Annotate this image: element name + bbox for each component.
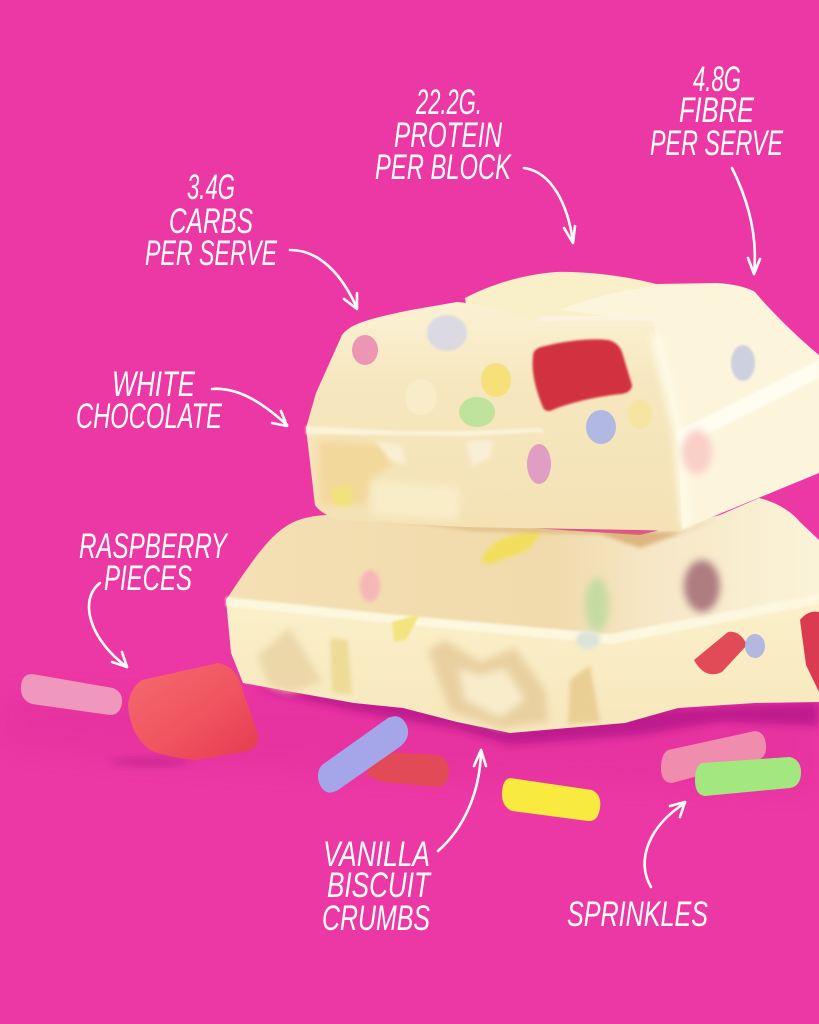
green sprinkle [695,757,801,796]
label: vanilla biscuit crumbs: CRUMBS [322,899,430,938]
arrow: vanilla [438,750,486,851]
arrow: protein [524,168,575,243]
label: protein: PROTEIN [394,116,502,155]
label: carbs [145,168,277,273]
arrow: carbs [290,250,357,309]
crumb texture [428,640,548,728]
label: white chocolate [76,365,222,436]
label: protein [375,83,512,187]
lower chocolate block [226,498,819,733]
label: carbs: CARBS [169,202,253,241]
yellow sprinkle [502,778,600,821]
lower block ledge highlight [226,594,819,644]
purple sprinkle [318,716,408,793]
arrow: sprinkles [645,802,685,887]
upper block front face [306,302,682,531]
label: sprinkles: SPRINKLES [567,895,708,934]
red sprinkle [366,752,449,787]
upper chocolate block [306,272,819,531]
raspberry piece in block [533,339,632,411]
label: carbs: PER SERVE [145,234,277,273]
label: carbs: 3.4G [187,168,235,207]
label: raspberry pieces: RASPBERRY [79,527,229,566]
label: fibre: FIBRE [679,91,754,130]
upper block fold highlight [655,335,686,528]
shadow between blocks [335,512,720,548]
label: white chocolate: WHITE [112,365,195,404]
upper block sprinkles [352,335,378,365]
raspberry piece [128,663,258,760]
label: raspberry pieces: PIECES [104,559,192,598]
label: raspberry pieces [79,527,229,598]
lower block raspberry bits [694,632,747,674]
floor shading [0,693,819,790]
ingredient pieces [21,663,801,821]
label: fibre [650,60,783,163]
arrow: fibre [732,168,760,274]
label: protein: PER BLOCK [375,148,512,187]
upper block ledge highlight [306,426,545,436]
lower block colour specks [480,532,542,564]
pink sprinkle [21,674,122,715]
label: vanilla biscuit crumbs: BISCUIT [327,866,432,905]
upper block ridge highlight [676,360,819,448]
arrow: raspberry [89,583,127,667]
label: protein: 22.2G. [415,83,482,122]
upper block right face [560,284,819,531]
lower block top face [226,498,819,640]
lower block front crumb face [226,600,819,733]
shadow under chocolate [250,688,819,745]
shadow: raspberry [110,757,190,767]
label: fibre: 4.8G [693,60,741,99]
label: vanilla biscuit crumbs [322,835,432,938]
arrow: white chocolate [212,389,287,426]
upper crumb texture [318,440,392,505]
label: white chocolate: CHOCOLATE [76,397,222,436]
label: vanilla biscuit crumbs: VANILLA [323,835,430,874]
pink sprinkle right [661,731,766,783]
upper block back ridge [465,272,770,330]
